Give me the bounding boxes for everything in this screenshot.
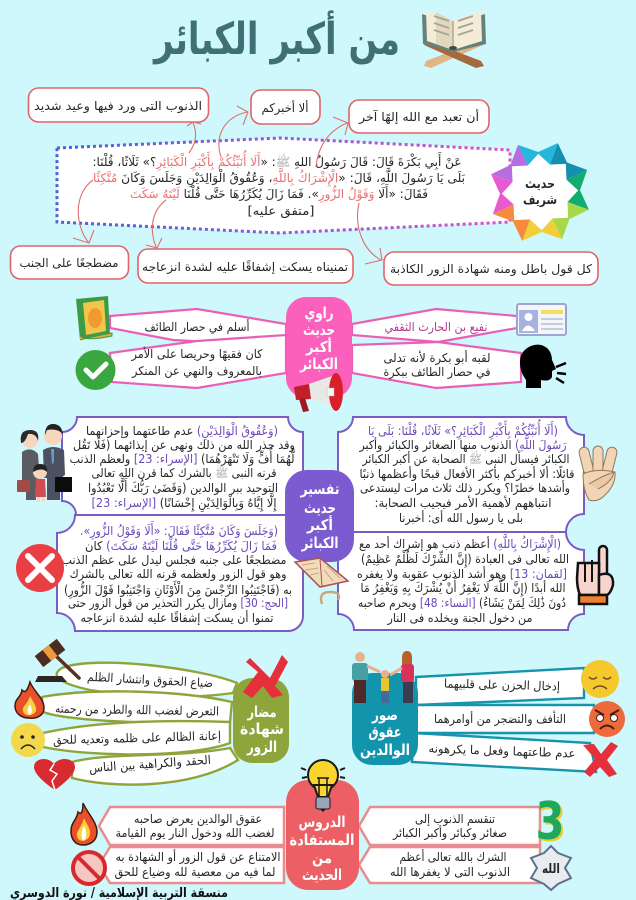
central box (352, 673, 418, 765)
panel: explanation top right: انتباههم لأهمية الأمر فيجيب الصحابة: (374, 495, 552, 511)
panel: explanation top left: وقد حذر الله من ذلك ونهى عن إيذائهما (فَلَا تَقُل (73, 437, 295, 453)
central label (299, 304, 338, 373)
icon: gavel (35, 639, 79, 682)
icon: three fingers hand (578, 446, 618, 501)
panel: explanation top left: التوحيد ببر الوالدين (وَقَضَىٰ رَبُّكَ أَلَّا تَعْبُدُوا (88, 476, 278, 496)
panel: explanation bottom right: الله أبدًا (إِنَّ اللَّهَ لَا يَغْفِرُ أَنْ يُشْرَكَ بِهِ وَيَغْفِرُ مَا (360, 576, 566, 597)
panel: explanation bottom right: (الْإِشْرَاكُ بِاللَّهِ) أعظم ذنب هو إشراك أحد مع (359, 532, 561, 553)
harms text: ضياع الحقوق وانتشار الظلم (87, 670, 213, 691)
icon: family with raised child (352, 651, 414, 703)
icon: Allah badge (531, 846, 571, 890)
central label: الكبائر (299, 355, 338, 373)
callout: sins with severe threat (28, 88, 208, 122)
icon: id card (517, 304, 566, 335)
panel: explanation top left: (وَعُقُوقُ الْوَالِدَيْنِ) عدم طاعتهما وإحزانهما (86, 421, 278, 441)
callout: wished he would stop: تمنيناه يسكت إشفاقًا عليه لشدة انزعاجه (142, 260, 348, 275)
bands (412, 668, 596, 772)
central label: الوالدين (360, 741, 410, 759)
panel: explanation top left: قرنه النبى ﷺ بالشرك كما قرن الله تعالى (91, 464, 276, 481)
panel: explanation bottom right (338, 532, 584, 630)
callout: sins with severe threat: الذنوب التى ورد فيها وعيد شديد (34, 99, 202, 114)
panel: explanation top right: الكبائر فيسأل النبى ﷺ الصحابة عن أكبر الكبائر (362, 450, 570, 467)
icon: light bulb (301, 760, 345, 812)
icon: open book with scroll (295, 558, 348, 604)
panel: forms of disobedience to parents (352, 668, 596, 772)
icon: sad face (11, 723, 45, 757)
central label (290, 813, 354, 884)
panel: explanation bottom right: من دخول الجنة ويخلده فى النار (387, 611, 532, 626)
central label: الحديث (302, 866, 342, 884)
harms text (53, 670, 221, 776)
central label: راوي (304, 304, 334, 323)
panel: explanation bottom left: تمنوا أن يسكت إشفاقًا عليه لشدة انزعاجه (80, 610, 274, 626)
central label: المستفادة (290, 831, 354, 849)
callout: shall I inform you (251, 90, 320, 124)
central label: من (312, 849, 332, 867)
central label: شهادة (240, 720, 284, 738)
icon: speaking head (520, 345, 566, 388)
panel: explanation top left: إِلَّا إِيَّاهُ وَبِالْوَالِدَيْنِ إِحْسَانًا) [الإسراء: 23] (92, 491, 277, 513)
panel: explanation top right: رَسُولَ اللَّهِ) الذنوب منها الصغائر والكبائر وأكبر (359, 433, 567, 453)
callout: false speech (384, 252, 598, 285)
callout: reclining: مضطجعًا على الجنب (20, 256, 118, 270)
arrows: hadith to callouts (73, 106, 382, 264)
central box: narrator (286, 297, 352, 398)
callout: shall I inform you: ألا أخبركم (262, 100, 308, 116)
lessons text: الشرك بالله تعالى أعظم (400, 849, 506, 865)
callout: worship another god (349, 100, 489, 133)
central label: أكبر (305, 337, 332, 356)
central label: عقوق (368, 723, 402, 741)
panel: explanation bottom right: [لقمان: 13] وهو أشد الذنوب عقوبة ولا يغفره (357, 566, 567, 582)
badge: hadith star: شريف (523, 193, 557, 208)
narrator facts: لقبه أبو بكرة لأنه تدلى (384, 350, 490, 366)
panel: explanation bottom left: مضطجعًا على جنبه فجلس ليدل على عظم الذنب (62, 553, 286, 568)
panel: explanation bottom left (57, 515, 303, 631)
central box: explanation: أكبر (306, 515, 333, 534)
icon: Allah badge: الله (542, 862, 560, 877)
hadith text: عَنْ أَبِي بَكْرَةَ قَالَ: قَالَ رَسُولُ اللهِ ﷺ: «أَلَا أُنَبِّئُكُمْ بِأَكْبَرِ الْكَبَائِرِ؟» ثَلَاثًا، قُلْنَا: (92, 150, 461, 171)
narrator facts (131, 319, 490, 380)
lessons text: لما فيه من معصية لله وضياع للحق (114, 865, 276, 880)
icon: pointing finger (577, 546, 613, 604)
panel: explanation top left: لَّهُمَا أُفٍّ وَلَا تَنْهَرْهُمَا) [الإسراء: 23] ولعظم الذنب (70, 447, 295, 467)
bands (110, 309, 521, 388)
central label: الدروس (298, 813, 346, 831)
icon: second red x (583, 742, 618, 777)
forms text (428, 676, 576, 762)
panel: explanation top right: بلى يا رسول الله أى: أخبرنا (399, 510, 523, 526)
icon: open book on stand (422, 11, 486, 68)
narrator facts: أسلم في حصار الطائف (144, 319, 250, 335)
lessons text: صغائر وكبائر وأكبر الكبائر (392, 825, 507, 841)
panel: explanation top left (62, 417, 303, 515)
icon: angry face (589, 701, 625, 737)
lessons text (114, 812, 510, 880)
lessons text: عقوق الوالدين يعرض صاحبه (134, 812, 262, 827)
panel: explanation bottom left: فَمَا زَالَ يُكَرِّرُهَا حَتَّى قُلْنَا لَيْتَهُ سَكَتَ) كان (85, 536, 277, 554)
icon: red x (243, 655, 288, 698)
lessons text: الذنوب التى لا يغفرها الله (390, 865, 510, 880)
harms text: إعانة الظالم على ظلمه وتعديه للحق (53, 729, 221, 748)
panel: explanation bottom left: [الحج: 30] ومازال يكرر التحذير من قول الزور حتى (68, 596, 288, 611)
panel: explanation bottom left: به (فَاجْتَنِبُوا الرِّجْسَ مِنَ الْأَوْثَانِ وَاجْتَنِبُوا قَوْلَ الزُّورِ) (64, 580, 292, 599)
forms text: عدم طاعتهما وفعل ما يكرهونه (428, 741, 576, 762)
icon: broken heart (34, 759, 75, 790)
icon: red cross circle (16, 544, 64, 592)
forms text: التأفف والتضجر من أوامرهما (434, 710, 566, 727)
harms text: التعرض لغضب الله والطرد من رحمته (55, 702, 219, 719)
central label: حديث (303, 321, 335, 339)
callout: false speech: كل قول باطل ومنه شهادة الزور الكاذبة (390, 262, 592, 277)
central label: صور (371, 706, 398, 724)
panel: hadith dotted box (57, 138, 510, 233)
panel: explanation bottom left: (وَجَلَسَ وَكَانَ مُتَّكِئًا فَقَالَ: «أَلَا وَقَوْلُ الزُّورِ». (80, 521, 278, 540)
icon: sad yellow face (581, 660, 619, 698)
panel: explanation top right: وأشدها خطرًا؟ ويكرر ذلك ثلاث مرات ليستدعى (360, 480, 570, 496)
central label: الزور (246, 738, 277, 756)
icon: flame (15, 682, 44, 718)
icon: green number three: 3 (538, 794, 566, 854)
central label: مضار (247, 703, 276, 721)
badge: hadith star (460, 112, 620, 272)
lessons text: تنقسم الذنوب إلى (415, 812, 495, 827)
central box: explanation (285, 470, 354, 562)
forms text: إدخال الحزن على قلبيهما (444, 676, 560, 695)
central box: explanation: الكبائر (301, 534, 338, 552)
narrator facts: بالمعروف والنهي عن المنكر (131, 364, 262, 379)
rows (99, 807, 540, 883)
panel: lessons learned (99, 780, 540, 890)
panel: harms of false testimony (42, 663, 289, 785)
central box (233, 678, 289, 763)
bands (42, 663, 238, 785)
panel: explanation bottom left: وهو قول الزور ولعظمه قرنه الله تعالى بالشرك (70, 567, 286, 582)
hadith text: فَقَالَ: «أَلَا وَقَوْلُ الزُّورِ». فَمَا زَالَ يُكَرِّرُهَا حَتَّى قُلْنَا لَيْتَهُ سَكَتَ (130, 184, 428, 203)
icon: green quran (76, 296, 112, 340)
panel: explanation bottom right: دُونَ ذَٰلِكَ لِمَنْ يَشَاءُ) [النساء: 48] ويحرم صاحبه (358, 596, 566, 611)
badge: hadith star: حديث (525, 177, 555, 192)
panel: hadith narrator (110, 297, 521, 398)
panel: explanation bottom right: الله تعالى فى العبادة (إِنَّ الشِّرْكَ لَظُلْمٌ عَظِيمٌ) (361, 549, 569, 568)
panel: explanation top right: قائلًا: ألا أخبركم بأكثر الأفعال قبحًا وأعظمها ذنبًا (360, 465, 574, 482)
narrator facts: في حصار الطائف ببكرة (384, 365, 490, 380)
narrator facts: كان فقيهًا وحريصا على الأمر (131, 346, 263, 362)
central label (240, 703, 284, 756)
harms text: الحقد والكراهية بين الناس (89, 753, 211, 776)
icon: second flame (71, 803, 97, 845)
lessons text: لغضب الله ودخول النار يوم القيامة (116, 826, 274, 841)
narrator facts: نفيع بن الحارث الثقفي (384, 320, 488, 335)
central box: explanation: تفسير (300, 480, 340, 498)
callout: reclining (10, 246, 128, 279)
icon: green number three: 3 (536, 792, 564, 852)
hadith text (92, 150, 465, 219)
hadith text: [متفق عليه] (248, 204, 314, 219)
central box: explanation: حديث (304, 499, 336, 517)
lessons text: الامتناع عن قول الزور أو الشهادة به (116, 849, 280, 865)
icon: check circle (76, 350, 116, 390)
panel: explanation top right: (أَلَا أُنَبِّئُكُمْ بِأَكْبَرِ الْكَبَائِرِ؟» ثَلَاثًا، قُلْنَا: بَلَى يَا (368, 419, 558, 440)
central label (360, 706, 410, 759)
central box (286, 780, 359, 890)
icon: megaphone (294, 373, 343, 412)
callout: wished he would stop (138, 249, 353, 283)
icon: family (17, 424, 72, 502)
callout: worship another god: أن تعبد مع الله إلهًا آخر (358, 109, 479, 125)
title: من أكبر الكبائر (152, 10, 400, 65)
icon: prohibition sign (73, 852, 105, 884)
hadith text: بَلَى يَا رَسُولَ اللَّهِ، قَالَ: «الْإِشْرَاكُ بِاللَّهِ، وَعُقُوقُ الْوَالِدَيْنِ وَجَلَسَ وَكَانَ مُتَّكِئًا (93, 166, 465, 188)
panel: explanation top right (338, 417, 584, 532)
